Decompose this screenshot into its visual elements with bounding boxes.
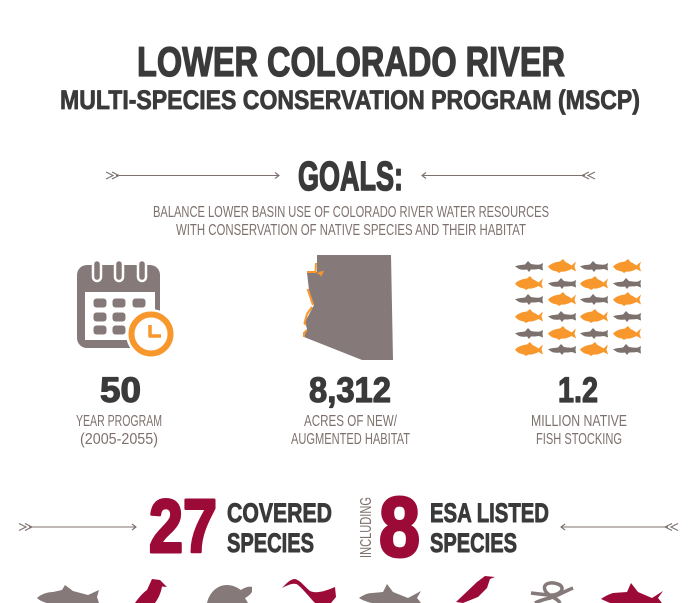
icon: calendar with clock: [77, 260, 176, 359]
arrow: species right: [561, 524, 678, 530]
goals description: WITH CONSERVATION OF NATIVE SPECIES AND THEIR HABITAT: [176, 222, 526, 239]
icon: raven: [456, 576, 495, 603]
stat: 50 year program: 50: [100, 371, 141, 410]
icon: fish grey 2: [359, 584, 421, 603]
number: 27 covered species: [149, 484, 332, 568]
stat: 1.2 million fish: 1.2: [558, 371, 598, 410]
stat: 8,312 acres: AUGMENTED HABITAT: [291, 431, 410, 448]
number: 8 ESA listed species: ESA LISTED: [430, 498, 549, 528]
stat: 1.2 million fish: FISH STOCKING: [536, 431, 622, 448]
icon: snake: [531, 583, 573, 603]
icon: Arizona map: [304, 255, 393, 360]
icon: fish grid: [515, 259, 641, 356]
icon: red fish: [601, 583, 663, 603]
arrow: goals right: [422, 172, 595, 179]
title: LOWER COLORADO RIVER: [137, 38, 565, 85]
stat: 50 year program: [76, 371, 162, 448]
number: 8 ESA listed species: 8: [379, 480, 420, 574]
icon: ibis: [282, 579, 336, 603]
stat: 50 year program: YEAR PROGRAM: [76, 413, 162, 430]
icon: turtle: [207, 585, 252, 603]
stat: 8,312 acres: 8,312: [309, 371, 391, 410]
number: 8 ESA listed species: SPECIES: [430, 528, 517, 558]
stat: 8,312 acres: [291, 371, 410, 448]
number: 27 covered species: COVERED: [227, 498, 332, 528]
stat: 8,312 acres: ACRES OF NEW/: [304, 413, 397, 430]
number: 8 ESA listed species: [379, 480, 549, 574]
icon: fish grey: [37, 585, 99, 603]
number: 27 covered species: 27: [149, 484, 217, 568]
stat: 1.2 million fish: [531, 371, 627, 448]
stat: 1.2 million fish: MILLION NATIVE: [531, 413, 627, 430]
goals description: [153, 204, 549, 239]
number: 27 covered species: SPECIES: [227, 528, 314, 558]
arrow: species left: [19, 524, 136, 530]
icon: cardinal: [135, 579, 167, 603]
goals heading: GOALS:: [298, 153, 403, 199]
arrow: goals left: [106, 172, 279, 179]
rotated label: including: INCLUDING: [358, 497, 375, 558]
stat: 50 year program: (2005-2055): [80, 431, 158, 448]
